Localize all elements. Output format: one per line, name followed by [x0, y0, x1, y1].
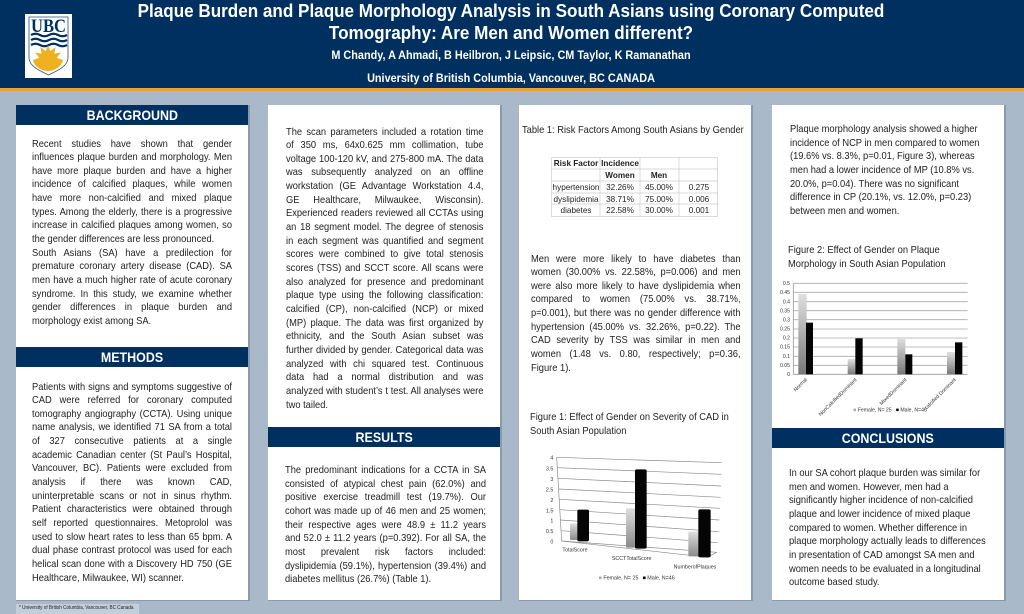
chart: figure 2 plaque morphology: 0.2 [783, 336, 790, 342]
table: risk factors: 45.00% [645, 183, 673, 192]
table: risk factors: 22.58% [606, 206, 634, 215]
text: risk factor findings: women (1.48 vs. 0.80, respectively; p=0.36, [530, 349, 740, 360]
panel: morphology and conclusions [772, 105, 1006, 601]
chart: figure 1 severity of CAD: 4 [550, 455, 553, 461]
text: background: morphology exist among SA. [32, 316, 151, 327]
text: background: Recent studies have shown that gender [32, 138, 232, 150]
chart: figure 2 plaque morphology: NonCalcifiedDominant [818, 377, 859, 418]
chart: figure 1 severity of CAD: 0.5 [546, 529, 553, 535]
chart: figure 2 plaque morphology: 0.35 [780, 308, 790, 314]
text: conclusions [789, 468, 986, 588]
text: risk factor findings: hypertension (45.00% vs. 32.26%, p=0.22). The [530, 322, 740, 333]
heading: conclusions [772, 428, 1004, 448]
heading: methods: METHODS [101, 349, 163, 365]
text: methods: CAD were referred for coronary computed [32, 395, 232, 406]
text: risk factor findings [530, 254, 740, 374]
text: results: consisted of atypical chest pain (62.0%) and [285, 479, 486, 490]
panel: risk factors and severity [519, 105, 753, 601]
text: scan parameters: analyzed with student’s t test. All analyses were [286, 386, 483, 397]
table: risk factors: 0.275 [689, 183, 710, 192]
heading: background: BACKGROUND [86, 107, 178, 123]
figure 2 caption: Morphology in South Asian Population [788, 259, 946, 270]
text: background: have more non-calcified and mixed plaque [32, 193, 232, 204]
chart: figure 2 plaque morphology [780, 281, 968, 418]
table: risk factors: Incidence [601, 159, 639, 168]
text: background: syndrome. In this study, we examine whether [32, 289, 232, 300]
chart: figure 2 plaque morphology: ■ Female, N= 25 ■ Male, N=46 [853, 408, 927, 414]
text: results: diabetes mellitus (26.7%) (Table 1). [285, 574, 431, 585]
chart: figure 2 plaque morphology: 0.5 [783, 281, 790, 287]
text: conclusions: compared to women. Whether difference in [789, 523, 967, 534]
text: methods: academic Canadian center (St Paul’s Hospital, [32, 450, 232, 461]
text: morphology findings [790, 124, 979, 217]
text: background: have more plaque burden and have a higher [32, 166, 232, 177]
text: scan parameters [286, 126, 484, 411]
text: morphology findings: difference in CP (20.1%, vs. 12.0%, p=0.23) [790, 192, 971, 203]
text: results: The predominant indications for a CCTA in SA [285, 465, 486, 476]
text: scan parameters: Experienced readers reviewed all CCTAs using [286, 208, 483, 219]
text: scan parameters: plaque type using the following classification: [286, 290, 483, 301]
table: risk factors: Men [651, 171, 667, 180]
table caption: Table 1: Risk Factors Among South Asians by Gender [522, 125, 744, 136]
text: conclusions: in presentation of CAD amongst SA men and [789, 550, 975, 561]
text: background: influences plaque burden and morphology. Men [32, 152, 232, 163]
panel: background and methods [16, 105, 250, 601]
table: risk factors: 0.001 [689, 206, 710, 215]
chart: figure 1 severity of CAD: SCCTTotalScore [612, 556, 652, 562]
heading: results [268, 427, 500, 447]
text: scan parameters: was subsequently analyzed on an offline [286, 167, 483, 178]
text: conclusions: significantly higher incidence of non-calcified [789, 495, 973, 506]
text: scan parameters: calcified (CP), non-calcified (NCP) or mixed [286, 304, 483, 315]
chart: figure 1 severity of CAD [546, 455, 722, 581]
text: conclusions: women needs to be evaluated in a longitudinal [789, 564, 981, 575]
figure 1 caption: South Asian Population [530, 426, 626, 437]
text: morphology findings: men had a lower incidence of MP (10.8% vs. [790, 165, 974, 176]
text: methods: tomography angiography (CCTA). Using unique [32, 409, 232, 420]
text: background: increase in calcified plaques among women, so [32, 220, 232, 231]
text: scan parameters: also analyzed for presence and predominant [286, 277, 483, 288]
chart: figure 1 severity of CAD: TotalScore [562, 548, 588, 554]
text: methods: Healthcare, Milwaukee, WI) scanner. [32, 573, 184, 584]
text: methods: analysis if there was known CAD, [32, 477, 232, 488]
text: conclusions: plaque and lower incidence of mixed plaque [789, 509, 970, 520]
text: scan parameters: analyzed with chi squared test. Continuous [286, 359, 483, 370]
text: methods: of 327 consecutive patients at a single [32, 436, 232, 447]
table: risk factors: hypertension [553, 183, 600, 192]
chart: figure 1 severity of CAD: 0 [550, 539, 553, 545]
chart: figure 1 severity of CAD: 2.5 [546, 487, 553, 493]
footer note [16, 604, 139, 614]
chart: figure 1 severity of CAD: NumberofPlaques [674, 564, 717, 570]
icon: UBC logo: UBC [31, 16, 66, 37]
text: results: positive exercise treadmill test (19.7%). Our [285, 492, 486, 503]
text: conclusions: plaque morphology actually leads to differences [789, 536, 986, 547]
text: risk factor findings: Figure 1). [530, 363, 570, 374]
chart: figure 1 severity of CAD: 2 [550, 498, 553, 504]
text: scan parameters: scores were combined to give total stenosis [286, 249, 483, 260]
table: risk factors: 30.00% [645, 206, 673, 215]
text: background: gender differences in plaque burden and [32, 302, 232, 313]
chart: figure 2 plaque morphology: 0.15 [780, 345, 790, 351]
figure 1 caption: Figure 1: Effect of Gender on Severity of CAD in [530, 412, 729, 423]
chart: figure 1 severity of CAD: 3 [550, 477, 553, 483]
table: risk factors: 75.00% [645, 195, 673, 204]
header banner [0, 0, 1024, 91]
text: scan parameters: an 18 segment model. The degree of stenosis [286, 222, 483, 233]
chart: figure 1 severity of CAD: ■ Female, N= 25 ■ Male, N=46 [599, 575, 675, 581]
text: risk factor findings: p=0.001), but there was no gender difference with [530, 308, 740, 319]
text: methods: used to slow heart rates to less than 65 bpm. A [32, 532, 232, 543]
chart: figure 2 plaque morphology: 0.3 [783, 317, 790, 323]
text: background: types. Among the elderly, there is a progressive [32, 207, 232, 218]
text: scan parameters: in each segment was quantified and segment [286, 236, 483, 247]
chart: figure 1 severity of CAD: 1.5 [546, 508, 553, 514]
chart: figure 2 plaque morphology: 0 [787, 372, 790, 378]
text: scan parameters: further divided by gender. Categorical data was [286, 345, 483, 356]
panel: scan parameters and results [268, 105, 502, 601]
text: morphology findings: 20.0%, p=0.04). There was no significant [790, 179, 959, 190]
figure 2 caption: Figure 2: Effect of Gender on Plaque [788, 245, 940, 256]
figure 2 caption [788, 245, 946, 270]
text: morphology findings: between men and women. [790, 206, 899, 217]
title: Plaque Burden and Plaque Morphology Analysis in South Asians using Coronary Computed [138, 0, 884, 21]
text: morphology findings: Plaque morphology analysis showed a higher [790, 124, 978, 135]
text: scan parameters: data had a normal distribution and was [286, 372, 483, 383]
text: scan parameters: (MP) plaque. The data was first organized by [286, 318, 483, 329]
text: scan parameters: The scan parameters included a rotation time [286, 126, 483, 138]
text: background [32, 138, 232, 327]
text: results [285, 465, 486, 585]
text: risk factor findings: Men were more likely to have diabetes than [530, 254, 740, 264]
chart: figure 1 severity of CAD: 3.5 [546, 466, 553, 472]
text: scan parameters: scores (TSS) and SCCT score. All scans were [286, 263, 483, 274]
text: results: dyslipidemia (59.1%), hypertension (39.4%) and [285, 561, 486, 572]
authors: M Chandy, A Ahmadi, B Heilbron, J Leipsic, CM Taylor, K Ramanathan [331, 48, 691, 62]
chart: figure 2 plaque morphology: 0.25 [780, 327, 790, 333]
table: risk factors [551, 157, 718, 217]
text: methods: Patients with signs and symptoms suggestive of [32, 382, 232, 392]
text: background: the gender differences are less pronounced. [32, 234, 214, 245]
chart: figure 2 plaque morphology: Normal [793, 377, 809, 393]
text: risk factor findings: CAD severity by TSS was similar in men and [530, 335, 740, 346]
text: risk factor findings: were also more likely to have dyslipidemia when [530, 281, 740, 292]
title: Tomography: Are Men and Women different? [329, 22, 693, 43]
icon: UBC logo [25, 14, 72, 78]
text: results: and 52.0 ± 11.2 years (p=0.392). For all SA, the [285, 533, 486, 544]
table: risk factors: Women [605, 171, 635, 180]
chart: figure 1 severity of CAD: 1 [550, 519, 553, 525]
chart: figure 2 plaque morphology: 0.1 [783, 354, 790, 360]
text: results: their respective ages were 48.9 ± 11.2 years [285, 520, 486, 531]
text: methods: self reported questionnaires. Metoprolol was [32, 518, 232, 529]
text: scan parameters: voltage 100-120 kV, and 275-800 mA. The data [286, 154, 483, 165]
table: risk factors: dyslipidemia [553, 195, 599, 204]
text: background: men have a much higher rate of acute coronary [32, 275, 232, 286]
text: conclusions: men and women. However, men had a [789, 482, 949, 493]
heading: methods [16, 347, 248, 367]
text: risk factor findings: women (30.00% vs. 22.58%, p=0.006) and men [530, 267, 740, 278]
table: risk factors: Risk Factor [554, 159, 599, 168]
table: risk factors: 38.71% [606, 195, 634, 204]
text: morphology findings: incidence of NCP in men compared to women [790, 138, 979, 149]
text: scan parameters: workstation (GE Advantage Workstation 4.4, [286, 181, 483, 192]
footer note: * University of British Columbia, Vancouver, BC Canada [19, 605, 133, 611]
text: background: South Asians (SA) have a predilection for [32, 248, 232, 259]
table: risk factors: 0.006 [689, 195, 710, 204]
text: conclusions: In our SA cohort plaque burden was similar for [789, 468, 980, 479]
chart: figure 2 plaque morphology: MixedDominant [879, 377, 909, 407]
text: scan parameters: of 350 ms, 64x0.625 mm collimation, tube [286, 140, 483, 151]
text: methods: name analysis, we identified 71 SA from a total [32, 422, 232, 433]
figure 1 caption [530, 412, 729, 437]
chart: figure 2 plaque morphology: calcified Dominant [924, 377, 958, 411]
text: methods: Patient characteristics were obtained through [32, 504, 232, 515]
text: conclusions: outcome based study. [789, 577, 880, 588]
text: results: most prevalent risk factors included: [285, 547, 486, 558]
text: scan parameters: two tailed. [286, 400, 327, 411]
title [138, 0, 884, 43]
table: risk factors: 32.26% [606, 183, 634, 192]
chart: figure 2 plaque morphology: 0.4 [783, 299, 790, 305]
text: methods [32, 382, 232, 584]
text: background: premature coronary artery disease (CAD). SA [32, 261, 232, 272]
text: methods: uninterpretable scans or not in sinus rhythm. [32, 491, 232, 502]
text: methods: dual phase contrast protocol was used for each [32, 545, 232, 556]
text: risk factor findings: compared to women (75.00% vs. 38.71%, [530, 294, 740, 305]
heading: background [16, 105, 248, 125]
text: scan parameters: GE Healthcare, Milwaukee, Wisconsin). [286, 195, 483, 206]
table: risk factors: diabetes [561, 206, 591, 215]
text: results: cohort was made up of 46 men and 25 women; [285, 506, 486, 517]
chart: figure 2 plaque morphology: 0.45 [780, 290, 790, 296]
chart: figure 2 plaque morphology: 0.05 [780, 363, 790, 369]
affiliation: University of British Columbia, Vancouver, BC CANADA [367, 71, 655, 85]
text: scan parameters: ethnicity, and the South Asian subset was [286, 331, 483, 342]
heading: conclusions: CONCLUSIONS [842, 430, 934, 446]
text: background: incidence of calcified plaques, while women [32, 179, 232, 190]
text: morphology findings: (19.6% vs. 8.3%, p=0.01, Figure 3), whereas [790, 151, 975, 162]
text: methods: helical scan done with a Discovery HD 750 (GE [32, 559, 232, 570]
text: methods: Vancouver, BC). Patients were excluded from [32, 463, 232, 474]
heading: results: RESULTS [355, 429, 413, 445]
